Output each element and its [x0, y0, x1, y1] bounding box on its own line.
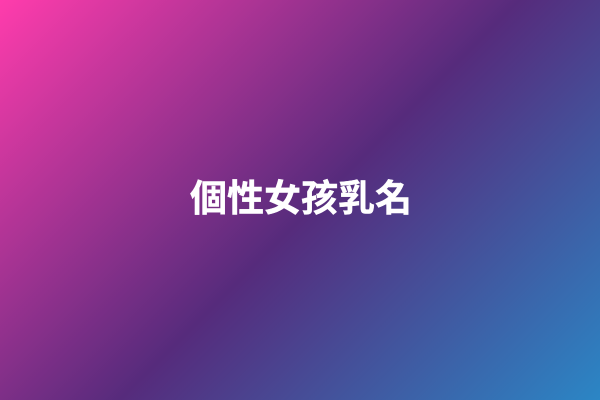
title: 個性女孩乳名 [190, 178, 412, 219]
